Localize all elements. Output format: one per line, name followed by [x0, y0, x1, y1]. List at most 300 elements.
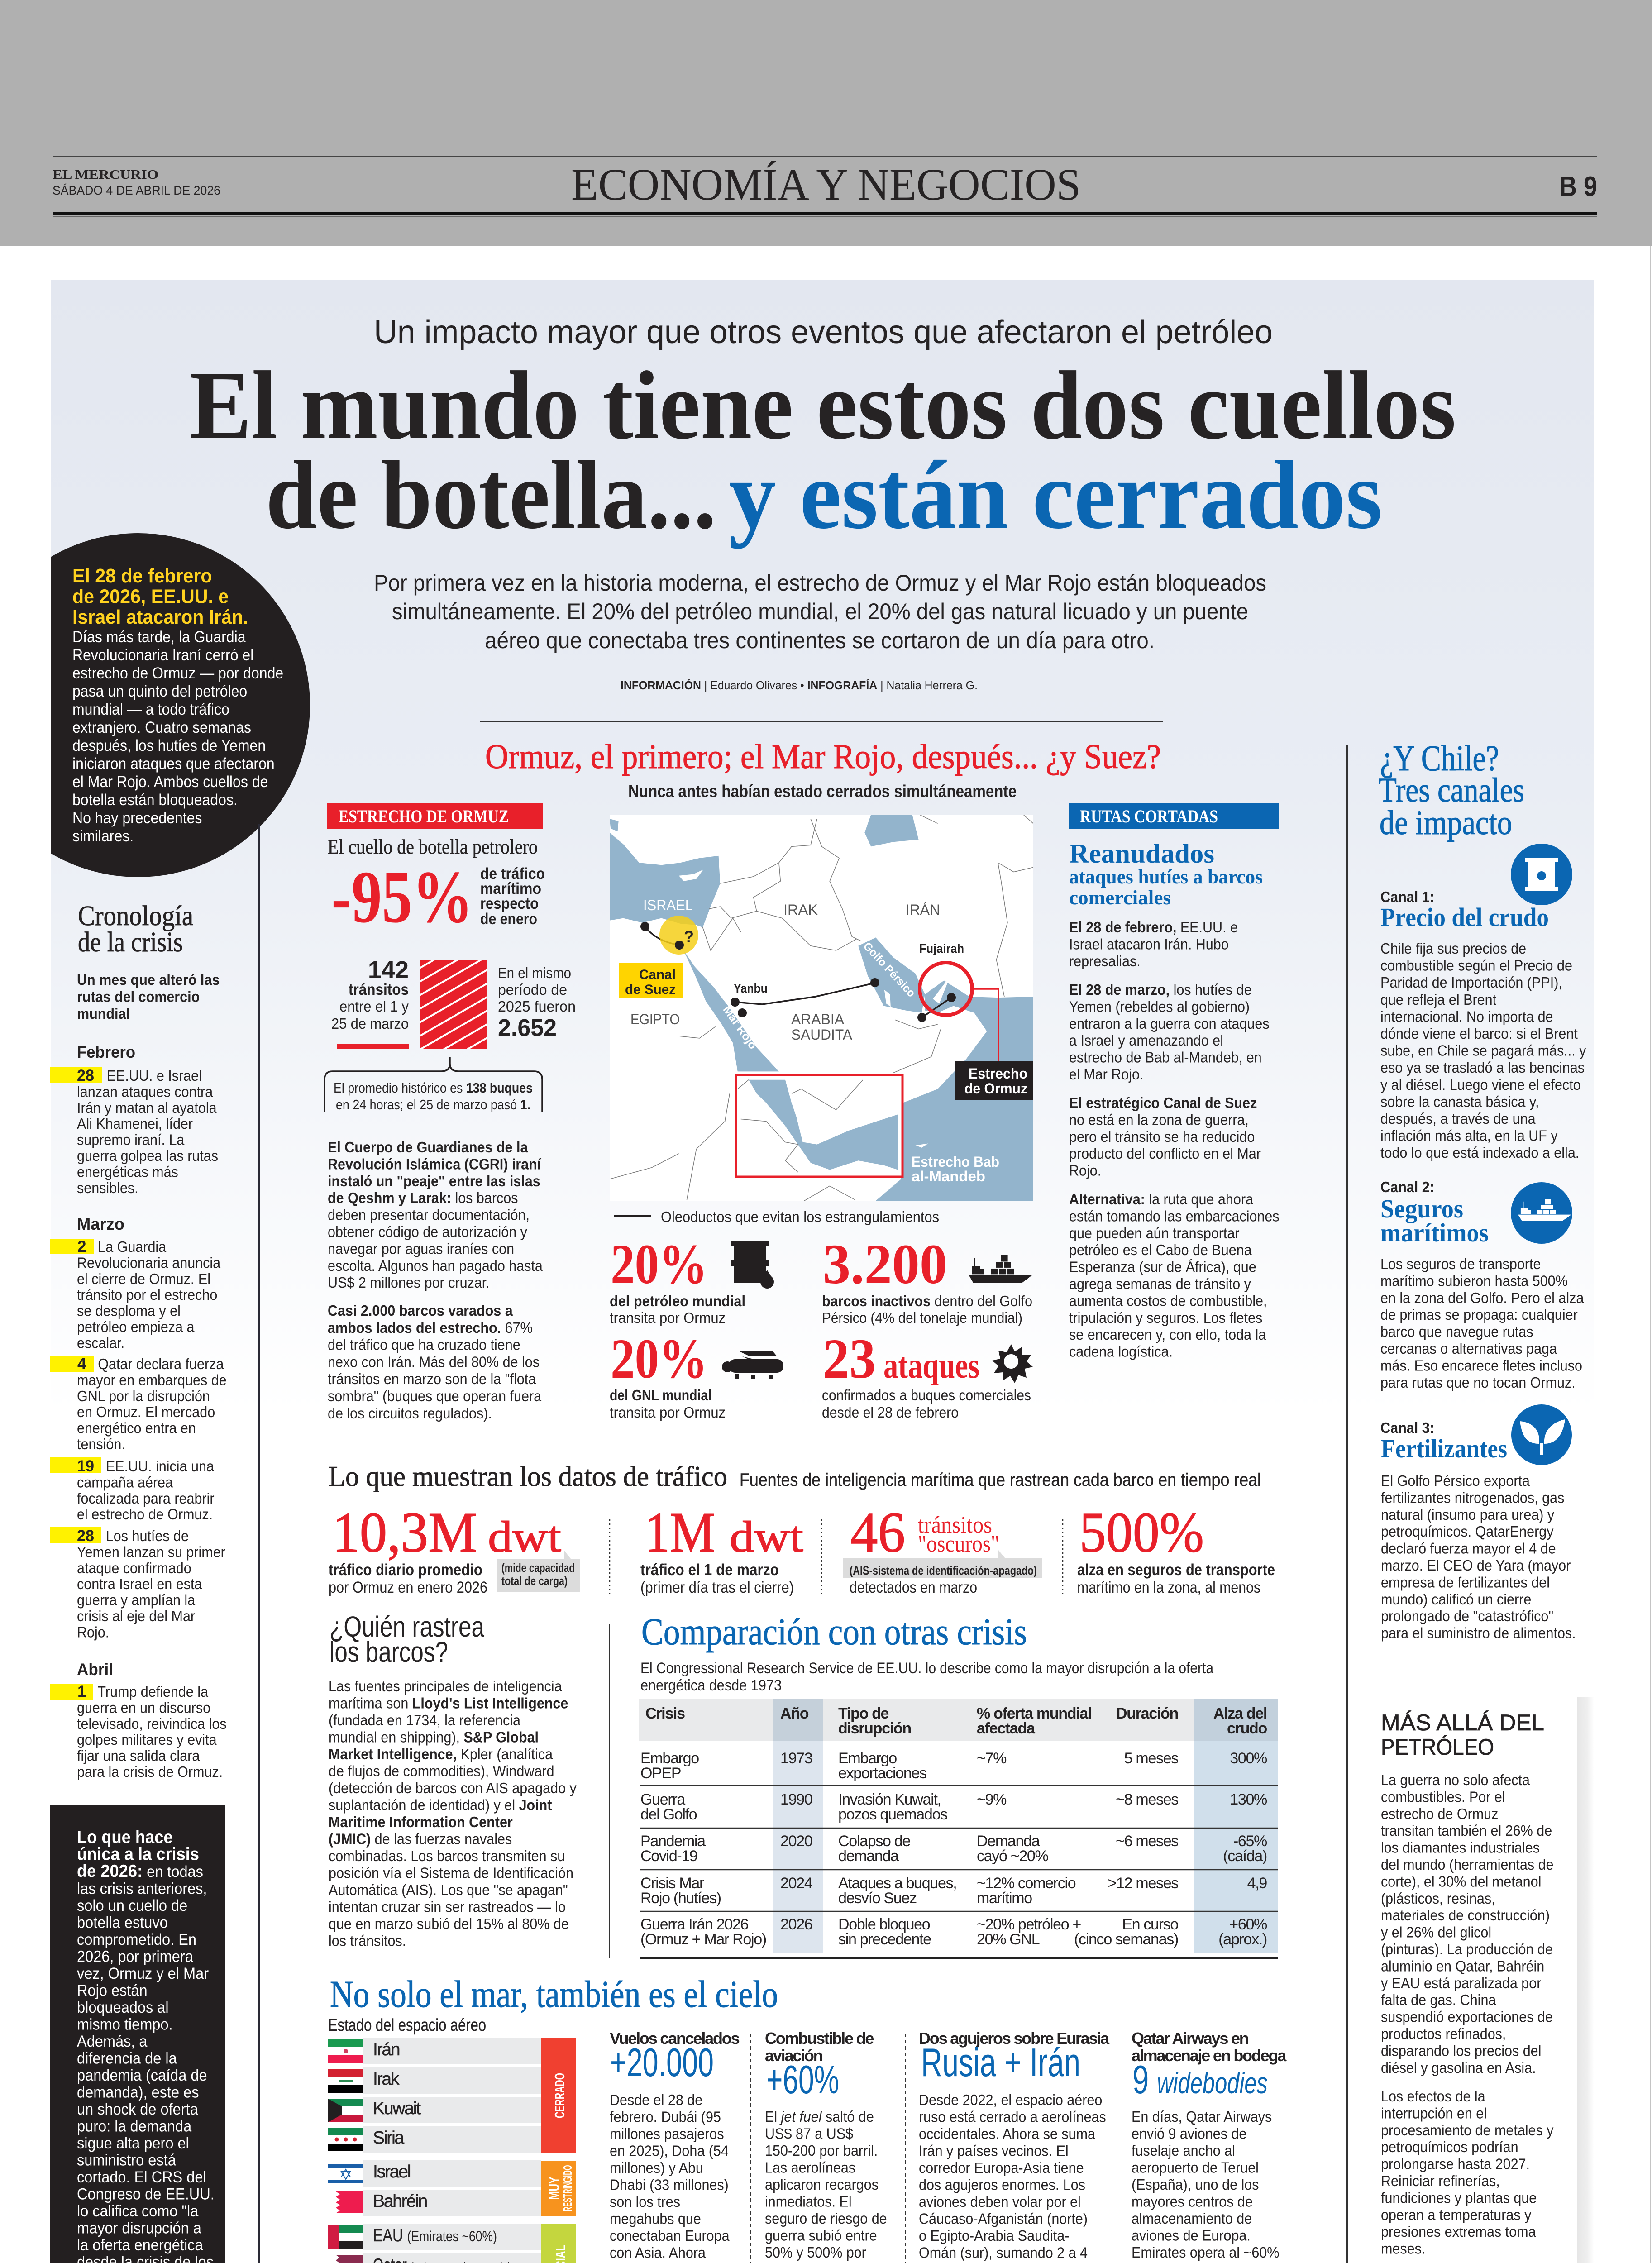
event 28 feb: lanzan ataques contra: [77, 1083, 213, 1100]
stat: 1M dwt: [640, 1501, 803, 1596]
icon: leaf badge: [1511, 1404, 1572, 1465]
section: traffic data: [329, 1460, 1275, 1596]
event 4 mar: GNL por la disrupción: [77, 1388, 210, 1404]
row: iran 2026: Guerra Irán 2026: [640, 1916, 749, 1933]
intro: El Congressional Research Service de EE.UU. lo describe como la mayor disrupción a la oferta: [640, 1660, 1213, 1677]
table header: % oferta mundial: [977, 1705, 1091, 1722]
dark callout: unique crisis: la oferta energética: [77, 2236, 203, 2254]
transit comparison: período de: [498, 981, 567, 998]
row: covid: Covid-19: [640, 1848, 697, 1865]
dark callout: unique crisis: mismo tiempo.: [77, 2015, 173, 2034]
flag: Iran: [328, 2039, 363, 2063]
text 2: presiones extremas toma: [1381, 2223, 1536, 2240]
dark callout: unique crisis: demanda), este es: [77, 2083, 199, 2101]
event 1 abr: [50, 1683, 227, 1780]
text: suplantación de identidad) y el: [329, 1796, 519, 1814]
column: combustible: 150-200 por barril.: [765, 2142, 878, 2159]
column: combustible: Las aerolíneas: [765, 2159, 855, 2176]
table header: afectada: [977, 1720, 1036, 1737]
text: 28 febrero: El 28 de febrero,: [1069, 919, 1176, 936]
kicker: Un impacto mayor que otros eventos que afectaron el petróleo: [374, 314, 1273, 350]
canal 1 text: y al diésel. Luego viene el efecto: [1380, 1076, 1581, 1093]
text 2: petroquímicos podrían: [1381, 2139, 1518, 2155]
column: qatar airways: almacenaje en bodega: [1132, 2046, 1287, 2065]
month: marzo: Marzo: [77, 1215, 124, 1233]
country labels: EAU (Emirates ~60%): [373, 2226, 497, 2245]
column: combustible: Combustible de: [765, 2029, 874, 2048]
text: de flujos de commodities), Windward: [329, 1762, 554, 1780]
event 4 mar: Qatar declara fuerza: [98, 1356, 224, 1372]
intro text: mundial — a todo tráfico: [72, 701, 229, 718]
section heading: Ormuz / Mar Rojo: Ormuz, el primero; el Mar Rojo, después... ¿y Suez?: [485, 738, 1161, 776]
section heading: Ormuz / Mar Rojo: Nunca antes habían estado cerrados simultáneamente: [628, 782, 1017, 801]
column: vuelos cancelados: [610, 2029, 740, 2263]
newspaper header band: ECONOMÍA Y NEGOCIOS: [571, 159, 1081, 210]
canal 2 heading: marítimos: [1380, 1218, 1489, 1247]
Suez highlight: ?: [684, 927, 694, 946]
stat: 20% GNL: [610, 1328, 783, 1421]
text: alternativa: se encarecen y, con ello, toda la: [1069, 1326, 1266, 1343]
event 2 mar: 2: [77, 1238, 86, 1256]
column: combustible: +60%: [766, 2057, 839, 2102]
event 4 mar: en Ormuz. El mercado: [77, 1404, 215, 1420]
dark callout: unique crisis: bloqueados al: [77, 1999, 169, 2016]
row: covid: cayó ~20%: [977, 1848, 1049, 1865]
row: embargo: 300%: [1230, 1750, 1267, 1767]
chronology subtitle: mundial: [77, 1005, 130, 1022]
bracket note: [325, 1057, 542, 1112]
text: Suez: Rojo.: [1069, 1162, 1101, 1179]
column: vuelos cancelados: +20.000: [610, 2040, 714, 2085]
column: qatar airways: almacenamiento de: [1132, 2210, 1252, 2227]
dark callout: unique crisis: cortado. El CRS del: [77, 2168, 206, 2186]
transit comparison: [331, 956, 576, 1049]
column: vuelos cancelados: Vuelos cancelados: [610, 2029, 740, 2048]
canal 1 text: inflación más alta, en la UF y: [1380, 1127, 1558, 1144]
text: y el 26% del glicol: [1381, 1924, 1491, 1941]
canal 2 heading: Seguros: [1380, 1194, 1463, 1223]
stat: 10,3M dwt: 10,3M: [332, 1501, 477, 1564]
stat: 20% GNL: 20%: [611, 1328, 707, 1390]
intro highlight: El 28 de febrero: [72, 565, 212, 587]
row: covid: (caída): [1223, 1848, 1267, 1865]
body text 2: tránsitos en marzo son de la "flota: [328, 1370, 536, 1387]
text: combinadas. Los barcos transmiten su: [329, 1848, 565, 1864]
stat: 1M dwt: tráfico el 1 de marzo: [640, 1561, 779, 1579]
canal 3 heading: Canal 3:: [1380, 1419, 1434, 1436]
flag: Qatar: [328, 2255, 363, 2263]
stat: 20% petroleo: transita por Ormuz: [610, 1309, 726, 1326]
text: materiales de construcción): [1381, 1907, 1550, 1924]
text 2: Reiniciar refinerías,: [1381, 2172, 1500, 2189]
stat: 3.200 barcos: 3.200: [823, 1233, 947, 1296]
stat: 23 ataques: confirmados a buques comerciales: [822, 1387, 1031, 1404]
text: 28 marzo: los hutíes de: [1170, 981, 1252, 998]
transit comparison: En el mismo: [498, 964, 571, 981]
text: (detección de barcos con AIS apagado y: [329, 1780, 577, 1796]
body text: obtener código de autorización y: [328, 1223, 527, 1240]
intro text: extranjero. Cuatro semanas: [72, 719, 251, 736]
map labels: Estrecho Bab: [912, 1154, 999, 1170]
heading: Comparación con otras crisis: [641, 1611, 1027, 1653]
column: qatar airways: (España), uno de los: [1132, 2176, 1259, 2193]
Chile heading: [1379, 739, 1524, 842]
event 4 mar: energético entra en: [77, 1419, 196, 1437]
text: corte), el 30% del metanol: [1381, 1873, 1541, 1890]
row: iran 2026: +60%: [1229, 1916, 1267, 1933]
body text 2: ambos lados del estrecho.: [328, 1319, 501, 1336]
column: combustible: aviación: [765, 2046, 822, 2065]
column: qatar airways: En días, Qatar Airways: [1132, 2108, 1272, 2125]
icon: LNG tanker: [722, 1351, 783, 1379]
Ormuz highlight: Estrecho: [969, 1065, 1027, 1082]
dark callout: unique crisis: vez, Ormuz y el Mar: [77, 1965, 209, 1982]
map geography: [610, 814, 1033, 1201]
column: vuelos cancelados: Dhabi (33 millones): [610, 2176, 729, 2193]
dark callout: unique crisis: Lo que hace: [77, 1827, 173, 1847]
canal 1 text: Paridad de Importación (PPI),: [1380, 974, 1562, 991]
red inset frame: [736, 1075, 902, 1177]
canal 1 text: sube, en Chile se pagará más... y: [1380, 1042, 1586, 1059]
canal 2 text: cercanas o alternativas paga: [1380, 1340, 1557, 1357]
heading: MÁS ALLÁ DEL: [1381, 1710, 1544, 1735]
column: qatar airways: Emirates opera al ~60%: [1132, 2244, 1279, 2261]
row: covid: demanda: [838, 1848, 899, 1865]
event 28 mar: guerra y amplían la: [77, 1591, 195, 1609]
dark callout: unique crisis: 2026, por primera: [77, 1948, 193, 1966]
row: mar rojo: desvío Suez: [838, 1890, 917, 1907]
row: mar rojo: Ataques a buques,: [838, 1875, 956, 1892]
text: que en marzo subió del 15% al 80% de: [329, 1915, 569, 1932]
dark callout: unique crisis: puro: la demanda: [77, 2117, 191, 2135]
event 1 abr: para la crisis de Ormuz.: [77, 1763, 223, 1780]
panel: Chile: [1379, 739, 1586, 1642]
column: combustible: [765, 2029, 887, 2263]
canal 2 text: marítimo subieron hasta 500%: [1380, 1272, 1568, 1289]
stat -95%: marítimo: [480, 880, 541, 898]
text: Suez: El estratégico Canal de Suez: [1069, 1094, 1257, 1111]
canal 3 text: mundo) calificó un cierre: [1381, 1591, 1531, 1608]
heading: los barcos?: [329, 1636, 448, 1668]
map labels: IRÁN: [906, 902, 940, 918]
newspaper header band: B 9: [1559, 171, 1597, 202]
table header: Tipo de: [838, 1705, 889, 1722]
event 19 mar: [50, 1457, 215, 1523]
row: golfo: del Golfo: [640, 1806, 697, 1823]
status: parcial: [541, 2224, 576, 2263]
dark callout: unique crisis: sigue alta pero el: [77, 2134, 189, 2152]
stat: 3.200 barcos: [822, 1233, 1033, 1326]
text: Suez: pero el tránsito se ha reducido: [1069, 1128, 1255, 1145]
dark callout: unique crisis: única a la crisis: [77, 1844, 199, 1864]
canal 3 text: El Golfo Pérsico exporta: [1381, 1472, 1530, 1489]
text: 28 febrero: Israel atacaron Irán. Hubo: [1069, 936, 1229, 953]
stat: 10,3M dwt: [329, 1501, 580, 1596]
canal 1 heading: Canal 1:: [1380, 888, 1434, 905]
map labels: SAUDITA: [791, 1026, 853, 1043]
stat -95%: de tráfico: [480, 865, 545, 883]
intro text: Revolucionaria Iraní cerró el: [72, 647, 253, 664]
canal 1 text: combustible según el Precio de: [1380, 957, 1572, 974]
right column rule: [1346, 745, 1348, 2263]
event 28 mar: crisis al eje del Mar: [77, 1608, 195, 1624]
canal 2 text: de primas se propaga: cualquier: [1380, 1306, 1578, 1323]
panel: chronology: [50, 901, 227, 1780]
transit comparison: 2025 fueron: [498, 998, 576, 1015]
table header: disrupción: [838, 1720, 911, 1737]
column: vuelos cancelados: Desde el 28 de: [610, 2091, 702, 2108]
chronology heading: Cronología: [78, 901, 193, 931]
column: qatar airways: fuselaje ancho al: [1132, 2142, 1235, 2159]
column: combustible: guerra subió entre: [765, 2227, 877, 2244]
event 19 mar: focalizada para reabrir: [77, 1490, 215, 1507]
stat -95%: de enero: [480, 910, 537, 928]
dark callout: unique crisis: botella estuvo: [77, 1914, 168, 1932]
event 28 mar: Los hutíes de: [106, 1528, 189, 1544]
status: muy restringido: RESTRINGIDO: [561, 2165, 574, 2211]
stat: 1M dwt: (primer día tras el cierre): [640, 1579, 794, 1596]
heading: [329, 1460, 1261, 1492]
intro text: iniciaron ataques que afectaron: [72, 755, 275, 773]
stat: 46: "oscuros": [918, 1531, 999, 1557]
map labels: Yanbu: [734, 981, 768, 995]
text: Lloyd's List Intelligence: [412, 1695, 568, 1712]
text: (plásticos, resinas,: [1381, 1890, 1495, 1907]
column: vuelos cancelados: en 2025), Doha (54: [610, 2142, 729, 2159]
row: iran 2026: En curso: [1122, 1916, 1178, 1933]
text: de las fuerzas navales: [371, 1830, 512, 1848]
main title: El mundo tiene estos dos cuellos: [190, 351, 1456, 459]
text: disparando los precios del: [1381, 2042, 1541, 2059]
body text 2: 67%: [501, 1319, 533, 1336]
canal 2 heading: [1380, 1179, 1489, 1247]
stat: 23 ataques: ataques: [883, 1346, 979, 1386]
text: Automática (AIS). Los que "se apagan": [329, 1881, 568, 1898]
row: mar rojo: ~12% comercio: [977, 1875, 1076, 1892]
text: La guerra no solo afecta: [1381, 1771, 1530, 1788]
stat: 20% GNL: del GNL mundial: [610, 1387, 711, 1404]
column: combustible: aplicaron recargos: [765, 2176, 879, 2193]
row: golfo: [640, 1791, 1267, 1823]
event 1 abr: guerra en un discurso: [77, 1699, 210, 1716]
table header: [645, 1705, 1267, 1737]
deck text: [374, 570, 1266, 653]
intro highlight: Israel atacaron Irán.: [72, 606, 248, 628]
icon: explosion: [992, 1344, 1033, 1383]
event 2 mar: el cierre de Ormuz. El: [77, 1270, 210, 1287]
event 28 feb: 28: [77, 1067, 94, 1084]
canal 3 text: fertilizantes nitrogenados, gas: [1381, 1489, 1564, 1506]
column: combustible: inmediatos. El: [765, 2193, 852, 2210]
row: iran 2026: 2026: [780, 1916, 812, 1933]
row: embargo: ~7%: [977, 1750, 1007, 1767]
column: dos agujeros: corredor Europa-Asia tiene: [919, 2159, 1084, 2176]
column: combustible: 50% y 500% por: [765, 2244, 866, 2261]
text: S&P Global: [463, 1728, 539, 1746]
tag: [1069, 803, 1279, 829]
dark callout: unique crisis: solo un cuello de: [77, 1897, 187, 1914]
text: (JMIC): [329, 1830, 371, 1848]
body text: US$ 2 millones por cruzar.: [328, 1274, 490, 1291]
text: (fundada en 1734, la referencia: [329, 1712, 520, 1728]
column: dos agujeros: Dos agujeros sobre Eurasia: [919, 2029, 1110, 2048]
stat: 23 ataques: 23: [823, 1328, 876, 1390]
map labels: Mar Rojo: [721, 1003, 759, 1051]
airspace status list: Estado del espacio aéreo: [328, 2016, 486, 2035]
main title: de botella...: [266, 441, 716, 549]
canal 2 heading: Canal 2:: [1380, 1179, 1434, 1195]
dark callout: unique crisis: de 2026:: [77, 1861, 143, 1881]
text: estrecho de Ormuz: [1381, 1805, 1498, 1822]
column: dos agujeros: occidentales. Ahora se suma: [919, 2125, 1095, 2142]
dark callout: unique crisis: Además, a: [77, 2033, 148, 2050]
panel: mas alla del petroleo: [1381, 1697, 1594, 2263]
month: febrero: Febrero: [77, 1043, 135, 1061]
flag: Israel: [328, 2163, 363, 2183]
text: mundial en shipping),: [329, 1728, 463, 1746]
main title: y están cerrados: [729, 441, 1382, 549]
stat: 10,3M dwt: tráfico diario promedio: [329, 1561, 482, 1579]
country labels: Siria: [373, 2128, 405, 2148]
table header: Año: [780, 1705, 809, 1722]
subheading: comerciales: [1069, 887, 1171, 909]
event 2 mar: Revolucionaria anuncia: [77, 1254, 220, 1271]
column: dos agujeros: o Egipto-Arabia Saudita-: [919, 2227, 1069, 2244]
row: golfo: ~9%: [977, 1791, 1007, 1808]
section: sky heading: No solo el mar, también es el cielo: [330, 1973, 778, 2015]
text: diésel y gasolina en Asia.: [1381, 2059, 1536, 2076]
row: golfo: Invasión Kuwait,: [838, 1791, 941, 1808]
stat: 20% petroleo: 20%: [611, 1233, 707, 1296]
body text: instaló un "peaje" entre las islas: [328, 1173, 540, 1189]
stat -95%: respecto: [480, 895, 539, 912]
dark callout: unique crisis: en todas: [143, 1863, 203, 1881]
column: combustible: El: [765, 2108, 781, 2125]
panel: estrecho de Ormuz: [325, 803, 576, 1422]
text 2: meses.: [1381, 2240, 1425, 2257]
column: vuelos cancelados: son los tres: [610, 2193, 680, 2210]
row: golfo: ~8 meses: [1116, 1791, 1178, 1808]
tag: ESTRECHO DE ORMUZ: [339, 806, 509, 826]
event 2 mar: tránsito por el estrecho: [77, 1286, 217, 1303]
chronology subtitle: rutas del comercio: [77, 988, 200, 1005]
row: covid: -65%: [1233, 1833, 1267, 1850]
text: 28 marzo: estrecho de Bab al-Mandeb, en: [1069, 1049, 1262, 1066]
stat: 3.200 barcos: Pérsico (4% del tonelaje mundial): [822, 1309, 1022, 1326]
flag: Iraq: [328, 2069, 363, 2093]
text 2: Los efectos de la: [1381, 2088, 1485, 2105]
stat: 10,3M dwt: por Ormuz en enero 2026: [329, 1579, 487, 1596]
event 28 feb: EE.UU. e Israel: [107, 1067, 202, 1084]
column: qatar airways: 9 widebodies: [1132, 2057, 1268, 2102]
dark callout: unique crisis: las crisis anteriores,: [77, 1880, 207, 1898]
icon: barrel badge: [1511, 844, 1572, 905]
table header: Duración: [1116, 1705, 1178, 1722]
stat: 1M dwt: dwt: [730, 1513, 803, 1561]
text 2: prolongarse hasta 2027.: [1381, 2155, 1530, 2172]
subheading: [1069, 839, 1263, 909]
event 28 feb: [50, 1067, 218, 1196]
body text 2: de los circuitos regulados).: [328, 1405, 492, 1422]
text: Suez: no está en la zona de guerra,: [1069, 1111, 1249, 1128]
body text 2: sombra" (buques que operan fuera: [328, 1388, 541, 1404]
row: embargo: 5 meses: [1124, 1750, 1178, 1767]
canal 3 text: natural (insumo para urea) y: [1381, 1506, 1554, 1523]
text: transitan también el 26% de: [1381, 1822, 1552, 1839]
text: alternativa: aumenta costos de combustible,: [1069, 1292, 1267, 1309]
row: covid: Pandemia: [640, 1833, 706, 1850]
stat: 46: (AIS-sistema de identificación-apagado): [850, 1564, 1037, 1577]
event 4 mar: [50, 1355, 227, 1452]
stat: 20% petroleo: del petróleo mundial: [610, 1293, 745, 1309]
stat: 23 ataques: desde el 28 de febrero: [822, 1404, 959, 1421]
text: 28 marzo: entraron a la guerra con ataques: [1069, 1015, 1270, 1032]
text: 28 marzo: Yemen (rebeldes al gobierno): [1069, 998, 1250, 1015]
event 28 feb: energéticas más: [77, 1163, 178, 1180]
stat: 46: tránsitos: [918, 1512, 992, 1538]
text: Maritime Information Center: [329, 1814, 513, 1830]
event 2 mar: escalar.: [77, 1334, 124, 1351]
row: golfo: 130%: [1230, 1791, 1267, 1808]
column: vuelos cancelados: con Asia. Ahora: [610, 2244, 706, 2261]
dark callout: unique crisis: un shock de oferta: [77, 2101, 198, 2118]
top gradient panel: [51, 280, 1594, 1412]
section heading: Ormuz / Mar Rojo: [485, 738, 1161, 801]
pipeline routes: [645, 926, 951, 1017]
column: vuelos cancelados: megahubs que: [610, 2210, 701, 2227]
country labels: Irán: [373, 2040, 400, 2059]
panel: rutas cortadas: [1069, 803, 1280, 1360]
intro text: pasa un quinto del petróleo: [72, 683, 247, 700]
body text 2: del tráfico que ha cruzado tiene: [328, 1336, 520, 1353]
intro highlight: de 2026, EE.UU. e: [72, 585, 229, 608]
map labels: [630, 897, 999, 1184]
event 28 mar: contra Israel en esta: [77, 1576, 202, 1592]
event 19 mar: 19: [77, 1457, 94, 1475]
table header: crudo: [1227, 1720, 1267, 1737]
event 4 mar: 4: [77, 1355, 86, 1373]
canal 1 text: todo lo que está indexado a ella.: [1380, 1144, 1579, 1161]
subheading: Reanudados: [1069, 839, 1214, 869]
chronology subtitle: Un mes que alteró las: [77, 971, 220, 988]
body text: los barcos: [451, 1189, 518, 1206]
dark callout: unique crisis: mayor disrupción a: [77, 2219, 201, 2237]
canal 1 text: después, a través de una: [1380, 1110, 1536, 1127]
event 1 abr: fijar una salida clara: [77, 1747, 200, 1764]
stat: 20% GNL: transita por Ormuz: [610, 1404, 726, 1421]
stat: 20% petroleo: [610, 1233, 774, 1326]
body text: escolta. Algunos han pagado hasta: [328, 1257, 543, 1274]
transit comparison: tránsitos: [349, 981, 409, 998]
text: 28 febrero: represalias.: [1069, 953, 1141, 969]
canal 2 text: en la zona del Golfo. Pero el alza: [1380, 1289, 1584, 1306]
canal 1 text: Chile fija sus precios de: [1380, 940, 1526, 957]
column: qatar airways: aviones de Europa.: [1132, 2227, 1251, 2244]
bracket note: El promedio histórico es 138 buques: [334, 1080, 533, 1096]
table header: Crisis: [645, 1705, 685, 1722]
canal 2 text: barco que navegue rutas: [1380, 1323, 1533, 1340]
column: vuelos cancelados: febrero. Dubái (95: [610, 2108, 721, 2125]
tag: RUTAS CORTADAS: [1080, 806, 1218, 826]
row: mar rojo: marítimo: [977, 1890, 1032, 1907]
center rule: [609, 1624, 610, 1958]
text: 28 marzo: El 28 de marzo,: [1069, 981, 1170, 998]
Ormuz highlight: [920, 963, 1033, 1100]
column: qatar airways: [1132, 2029, 1287, 2263]
column: dos agujeros: Omán (sur), sumando 2 a 4: [919, 2244, 1088, 2261]
bracket note: en 24 horas; el 25 de marzo pasó 1.: [336, 1097, 530, 1112]
deck text: aéreo que conectaba tres continentes se cortaron de un día para otro.: [485, 628, 1155, 653]
